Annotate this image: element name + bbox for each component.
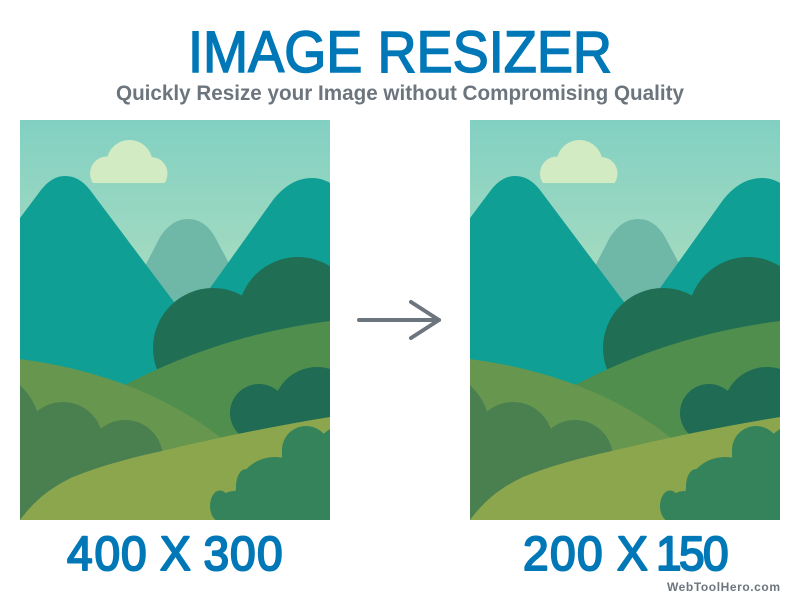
sky bbox=[470, 120, 780, 264]
arrow bbox=[359, 302, 439, 338]
back mountain bbox=[146, 219, 228, 302]
original size label: 400X300 bbox=[67, 526, 283, 580]
left mountain bbox=[20, 176, 174, 385]
front bush bbox=[660, 426, 780, 520]
front hill bbox=[20, 417, 330, 520]
back mountain bbox=[596, 219, 678, 302]
title: IMAGE RESIZER bbox=[188, 20, 612, 85]
left mountain bbox=[470, 176, 624, 385]
icon: cloud bbox=[540, 140, 618, 183]
middle hill bbox=[576, 321, 780, 438]
middle hill bbox=[126, 321, 330, 438]
right mountain bbox=[660, 178, 780, 296]
icon: cloud bbox=[90, 140, 168, 183]
bushes on left bbox=[470, 386, 612, 520]
right mountain bbox=[210, 178, 330, 296]
left hill bbox=[20, 359, 220, 451]
panel: original image landscape bbox=[20, 120, 330, 520]
dark bushes behind hills bbox=[153, 257, 330, 370]
sky bbox=[20, 120, 330, 264]
watermark: WebToolHero.com bbox=[667, 580, 780, 594]
left hill bbox=[470, 359, 670, 451]
front bush bbox=[210, 426, 330, 520]
front hill bbox=[470, 417, 780, 520]
subtitle: Quickly Resize your Image without Compromising Quality bbox=[116, 82, 684, 105]
panel: resized image landscape bbox=[470, 120, 780, 520]
resized size label: 200X150 bbox=[523, 526, 729, 580]
dark bushes behind hills bbox=[603, 257, 780, 370]
bushes on left bbox=[20, 386, 162, 520]
dark bushes on right bbox=[680, 367, 780, 434]
dark bushes on right bbox=[230, 367, 330, 434]
